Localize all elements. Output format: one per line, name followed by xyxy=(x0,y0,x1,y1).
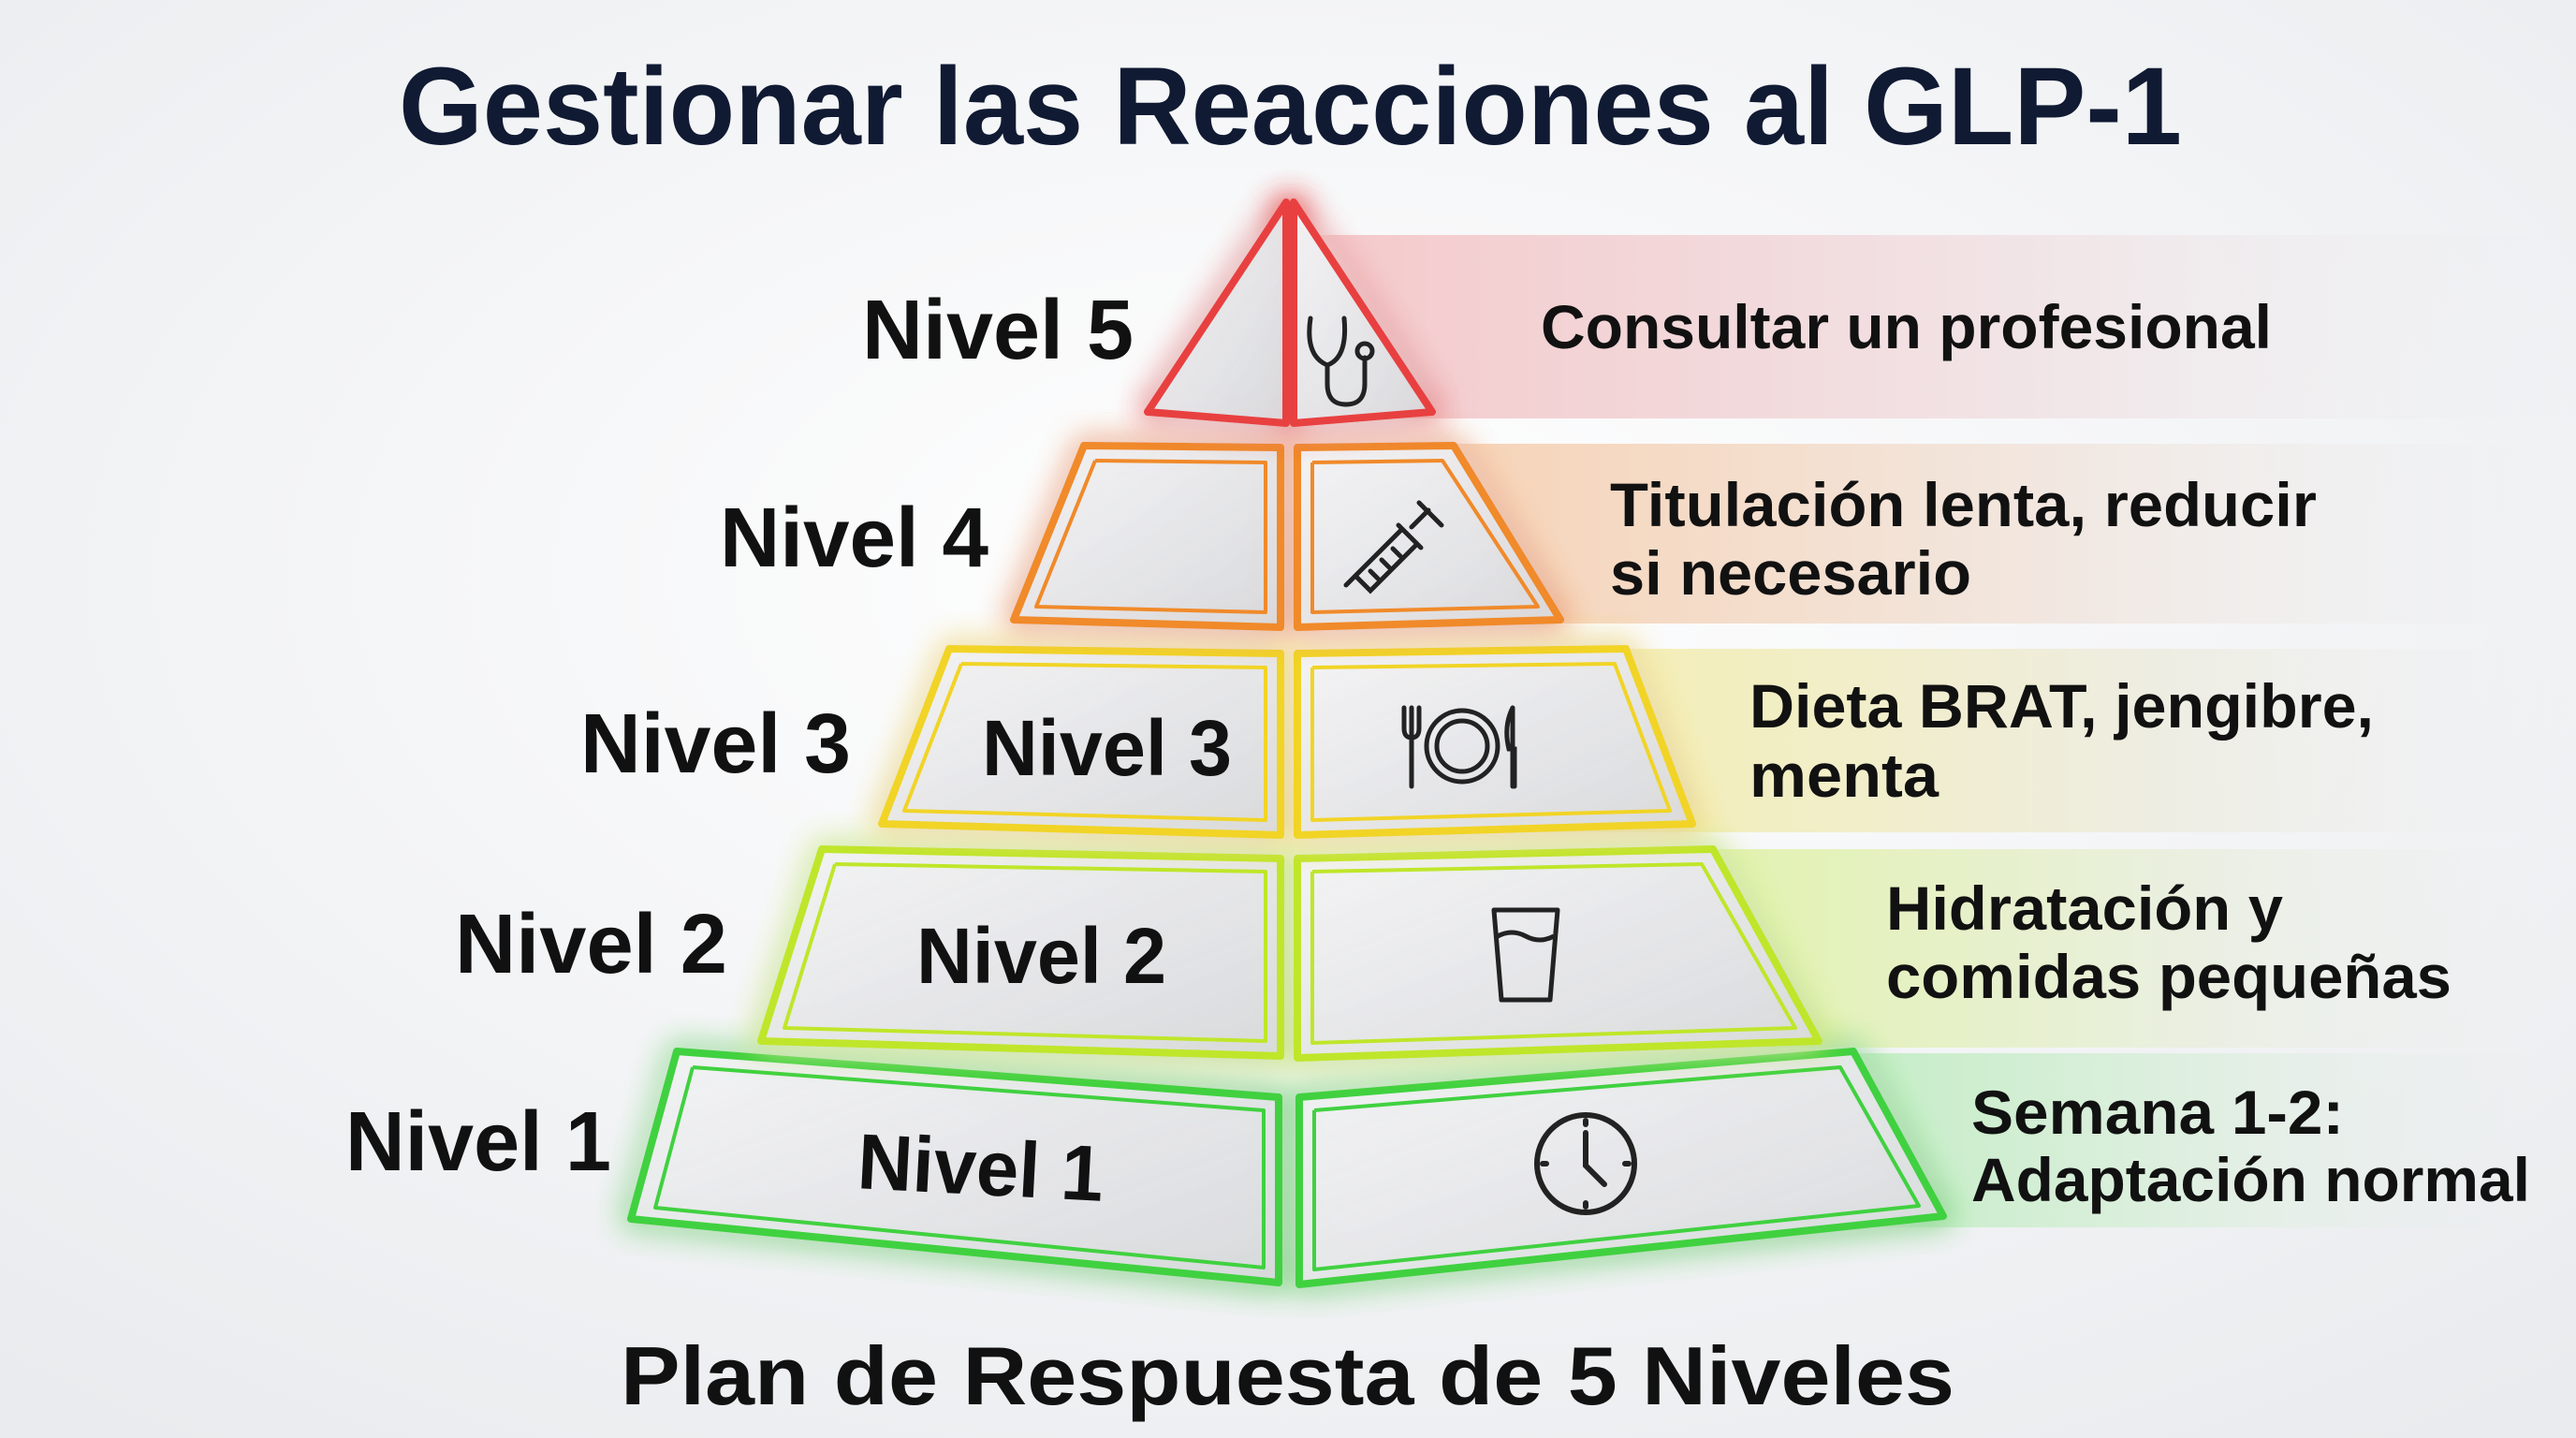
inner labels xyxy=(856,704,1232,1218)
left labels xyxy=(345,284,1134,1189)
left labels: Nivel 4 xyxy=(720,492,988,585)
descriptions: si necesario xyxy=(1610,538,1971,608)
left labels: Nivel 1 xyxy=(345,1095,611,1189)
pyramid xyxy=(631,202,1943,1284)
inner labels: Nivel 3 xyxy=(982,704,1232,792)
level 4 xyxy=(1014,446,1560,627)
descriptions: Dieta BRAT, jengibre, xyxy=(1749,671,2374,741)
icon: clock xyxy=(1537,1115,1634,1212)
left labels: Nivel 5 xyxy=(862,284,1134,377)
descriptions: comidas pequeñas xyxy=(1886,942,2452,1011)
descriptions: Adaptación normal xyxy=(1971,1145,2530,1214)
icon: syringe xyxy=(1346,503,1442,591)
icon: stethoscope xyxy=(1310,318,1372,404)
left labels: Nivel 3 xyxy=(580,697,851,791)
inner labels: Nivel 1 xyxy=(856,1117,1105,1218)
descriptions: Semana 1-2: xyxy=(1971,1078,2344,1147)
level 5 xyxy=(1148,202,1432,423)
descriptions: Titulación lenta, reducir xyxy=(1610,470,2317,539)
icon: plate xyxy=(1404,708,1515,786)
left labels: Nivel 2 xyxy=(455,898,727,991)
descriptions xyxy=(1541,292,2530,1214)
title: Gestionar las Reacciones al GLP-1 xyxy=(399,45,2182,169)
level 3 xyxy=(882,649,1692,835)
inner labels: Nivel 2 xyxy=(916,912,1166,1000)
level 2 xyxy=(761,849,1819,1058)
descriptions: menta xyxy=(1749,741,1939,810)
descriptions: Consultar un profesional xyxy=(1541,292,2272,361)
bottom subtitle: Plan de Respuesta de 5 Niveles xyxy=(621,1329,1954,1422)
icon: glass xyxy=(1494,910,1558,1000)
descriptions: Hidratación y xyxy=(1886,873,2283,943)
level 1 xyxy=(631,1051,1943,1284)
right bands xyxy=(1310,235,2576,1227)
